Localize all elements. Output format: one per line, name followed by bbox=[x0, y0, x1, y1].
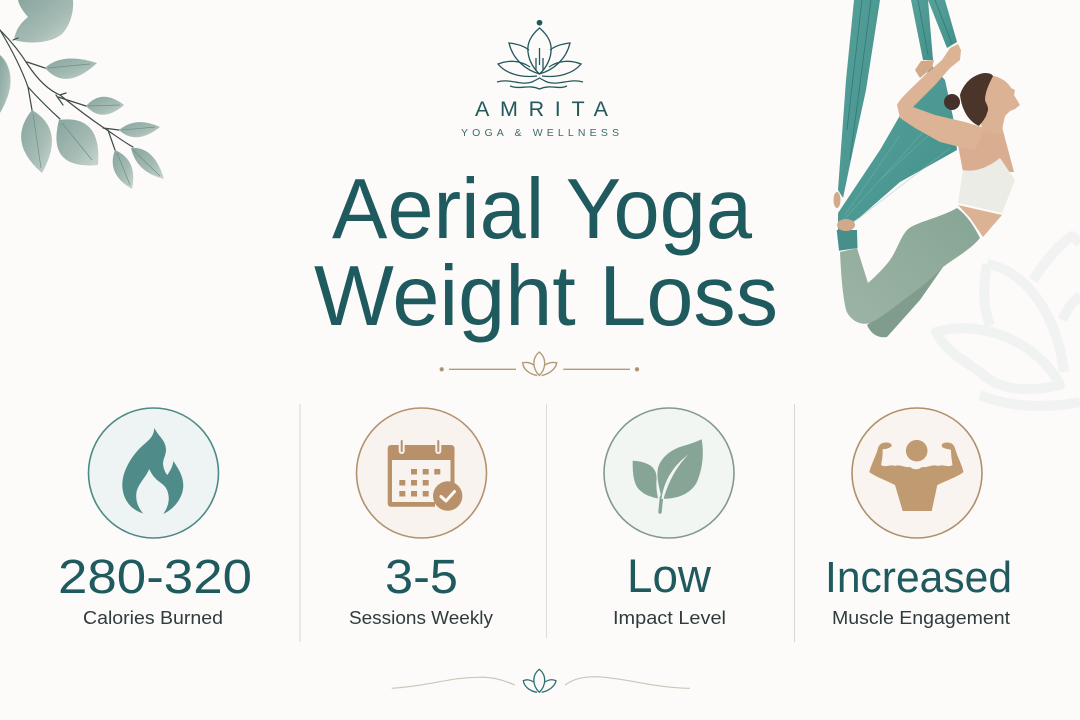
panel: sessions weekly bbox=[349, 408, 493, 628]
leaf midribs bbox=[33, 64, 160, 185]
arm bbox=[897, 44, 985, 150]
stat label: Impact Level bbox=[613, 608, 726, 628]
title ornament divider bbox=[440, 352, 638, 376]
panel: muscle engagement bbox=[825, 408, 1012, 628]
botanical branch, top left bbox=[0, 0, 164, 189]
footer ornament divider bbox=[392, 669, 690, 692]
brand name: AMRITA bbox=[475, 97, 609, 121]
silk strands bbox=[838, 0, 957, 198]
divider 1 bbox=[300, 404, 301, 642]
aerial yoga figure in teal silk hammock bbox=[834, 0, 1020, 337]
stat value: 3-5 bbox=[385, 551, 458, 604]
rear leg bbox=[867, 267, 943, 337]
stat label: Sessions Weekly bbox=[349, 608, 493, 628]
divider 3 bbox=[794, 404, 795, 642]
logo: Amrita Yoga & Wellness bbox=[461, 20, 619, 139]
lotus mark bbox=[497, 20, 583, 89]
title: Weight Loss bbox=[314, 249, 778, 344]
icon: calendar with check bbox=[356, 408, 486, 538]
divider 2 bbox=[546, 404, 547, 638]
tagline: YOGA & WELLNESS bbox=[461, 127, 619, 139]
watermark: lotus outline bbox=[936, 236, 1080, 406]
midriff bbox=[958, 205, 1002, 237]
silk hammock bbox=[838, 66, 957, 232]
upper torso bbox=[958, 127, 1014, 172]
white sports top bbox=[958, 158, 1015, 213]
stat label: Muscle Engagement bbox=[832, 608, 1010, 628]
icon: flexing torso bbox=[852, 408, 982, 538]
hair bun bbox=[944, 94, 960, 110]
feet bbox=[834, 60, 934, 231]
icon: flame bbox=[88, 408, 218, 538]
stat value: Low bbox=[627, 549, 712, 602]
stat label: Calories Burned bbox=[83, 608, 223, 628]
stat value: 280-320 bbox=[58, 551, 252, 604]
title bbox=[314, 162, 778, 344]
front leg in sage leggings bbox=[840, 208, 980, 324]
silk wrap at ankle bbox=[837, 230, 858, 251]
title: Aerial Yoga bbox=[332, 162, 753, 257]
icon: leaf bbox=[604, 408, 734, 538]
panel: impact level bbox=[604, 408, 734, 628]
hair bbox=[960, 73, 993, 126]
panel: calories burned bbox=[58, 408, 252, 628]
stems bbox=[0, 30, 133, 150]
leaves bbox=[0, 0, 164, 189]
neck and face bbox=[978, 75, 1020, 134]
stat value: Increased bbox=[825, 553, 1012, 602]
